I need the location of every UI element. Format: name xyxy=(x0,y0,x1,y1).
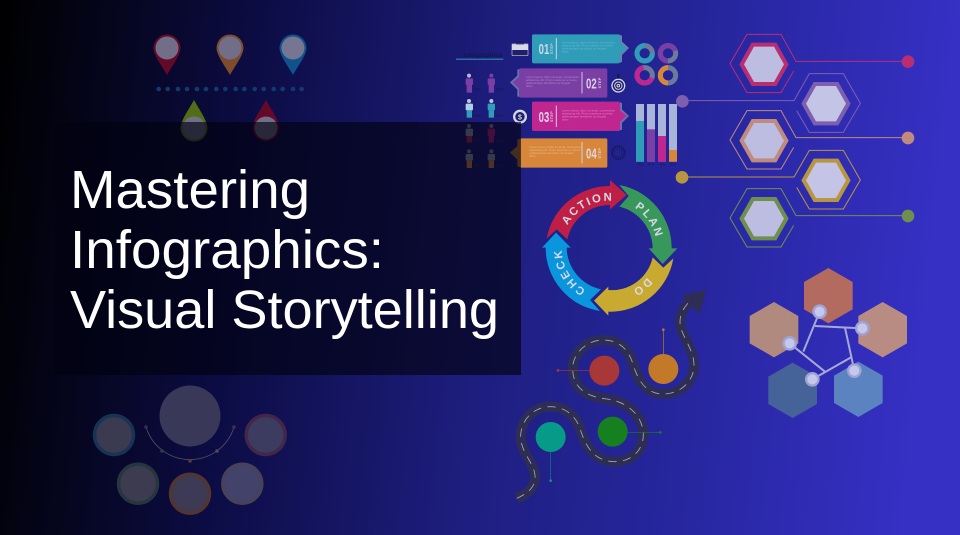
node xyxy=(855,321,870,336)
step 2: dolor. xyxy=(526,84,533,88)
arrow: do xyxy=(594,257,673,316)
title: Infographics: xyxy=(70,220,384,280)
bar: magenta: 45% xyxy=(659,162,665,166)
people rows xyxy=(466,74,504,168)
step 4: Lorem ipsum dolor sit amet, consectetur xyxy=(529,145,582,149)
step 3: STEP xyxy=(550,111,554,122)
dotted timeline xyxy=(156,87,304,91)
step 2: adipiscing elit. Proin maximus a metus xyxy=(526,78,577,82)
node xyxy=(847,363,862,378)
arrow: action xyxy=(547,180,627,239)
step 4: adipiscing elit. Proin maximus a metus xyxy=(529,148,581,152)
pin: blue xyxy=(280,34,306,75)
step 1: adipiscing elit. Proin maximus a metus xyxy=(562,44,613,48)
arrow: plan xyxy=(619,185,677,264)
node xyxy=(782,336,797,351)
bar: purple: 55% xyxy=(648,162,654,166)
title: Visual Storytelling xyxy=(70,280,499,340)
step 4 xyxy=(510,138,607,168)
pentagon lines xyxy=(790,312,862,379)
step 4: dolor. xyxy=(529,154,537,158)
heading: Infographics xyxy=(463,53,503,59)
step 3 xyxy=(532,102,629,131)
node xyxy=(805,372,820,387)
person: purple right: 50% xyxy=(496,88,504,92)
pin: red xyxy=(154,34,180,75)
circle: orange ring xyxy=(170,474,210,513)
hexagon item: salmon xyxy=(730,111,914,169)
road map diagram xyxy=(517,290,706,498)
step 2: Lorem ipsum dolor sit amet, consectetur xyxy=(526,75,579,79)
hexagon item: purple xyxy=(676,74,860,132)
location pins row xyxy=(154,34,306,142)
numbered steps infographic xyxy=(456,34,677,168)
person: purple left: 50% xyxy=(474,88,482,92)
stop: orange xyxy=(648,328,678,384)
bar chart xyxy=(636,104,677,166)
circle: blue ring xyxy=(94,416,134,454)
person: orange left: 50% xyxy=(474,164,482,168)
step 1: STEP xyxy=(550,43,554,54)
heading underline xyxy=(456,58,503,61)
node xyxy=(812,304,827,319)
step 3: 03 xyxy=(539,110,549,126)
hexagon item: green xyxy=(730,189,914,247)
step 1: pellentesque hendrerit, ac feugiat xyxy=(562,47,606,51)
step 3: pellentesque hendrerit, ac feugiat xyxy=(562,115,606,119)
hexagon: lower right xyxy=(834,362,883,417)
title panel xyxy=(55,122,521,375)
arc connector xyxy=(146,427,234,460)
person: pink right: 50% xyxy=(496,139,504,143)
pin: orange xyxy=(216,34,244,75)
road arrowhead xyxy=(682,290,706,314)
pin: crimson xyxy=(252,100,280,142)
circle: mauve ring xyxy=(223,464,262,503)
step 2: pellentesque hendrerit, ac feugiat xyxy=(526,81,570,85)
circle diagram xyxy=(94,386,285,513)
label: check: CHECK xyxy=(554,250,584,295)
step 2: STEP xyxy=(598,77,602,88)
donut: teal xyxy=(637,46,652,61)
stop: red xyxy=(557,356,619,386)
pin: green xyxy=(180,100,208,142)
circle: green ring xyxy=(118,464,158,503)
stop: teal xyxy=(536,422,566,482)
hexagon: lower left xyxy=(768,363,817,418)
donut charts xyxy=(635,46,676,85)
step 1: 01 xyxy=(539,42,549,58)
central circle xyxy=(160,386,220,446)
hexagon: left xyxy=(750,302,798,357)
step 4: pellentesque hendrerit, ac feugiat xyxy=(529,151,574,155)
person: teal left: 50% xyxy=(474,114,482,118)
pentagon hexagon cluster xyxy=(750,268,907,418)
icon: briefcase xyxy=(512,42,528,56)
person: pink left: 50% xyxy=(474,139,482,143)
bar: teal: 70% xyxy=(637,162,643,166)
hexagon list diagram xyxy=(676,34,914,247)
stop: green xyxy=(598,417,662,447)
hexagon item: crimson xyxy=(730,34,914,93)
circle: maroon ring xyxy=(246,416,285,454)
icon: coin xyxy=(513,110,527,124)
icon: target xyxy=(612,74,625,92)
icon: coin: $ xyxy=(518,114,522,121)
person: orange right: 50% xyxy=(496,164,504,168)
step 2: 02 xyxy=(586,76,597,92)
step 3: Lorem ipsum dolor sit amet, consectetur xyxy=(562,109,615,113)
hexagon: top xyxy=(804,268,853,323)
donut: orange xyxy=(660,68,676,83)
donut: purple xyxy=(660,46,676,61)
step 4: STEP xyxy=(598,147,602,159)
step 1: Lorem ipsum dolor sit amet, consectetur xyxy=(562,41,615,45)
title: Mastering xyxy=(70,160,310,220)
road xyxy=(517,300,694,498)
step 2 xyxy=(510,68,607,98)
label: do: DO xyxy=(634,278,653,295)
arc dots xyxy=(144,425,236,463)
donut: magenta xyxy=(635,66,654,85)
bar: orange: 20% xyxy=(670,162,676,166)
arrow: check xyxy=(542,233,601,311)
step 3: dolor. xyxy=(562,118,569,122)
road dashes xyxy=(517,300,694,498)
label: action: ACTION xyxy=(562,192,612,225)
step 1: dolor. xyxy=(562,50,569,54)
icon: gear xyxy=(612,146,625,159)
step 3: adipiscing elit. Proin maximus a metus xyxy=(562,112,613,116)
label: plan: PLAN xyxy=(635,202,663,236)
PDCA cycle diagram xyxy=(542,180,678,316)
hexagon: right xyxy=(858,302,907,357)
step 1 xyxy=(532,34,629,63)
hexagon item: gold xyxy=(676,150,860,209)
person: teal right: 50% xyxy=(496,114,504,118)
step 4: 04 xyxy=(586,147,597,163)
